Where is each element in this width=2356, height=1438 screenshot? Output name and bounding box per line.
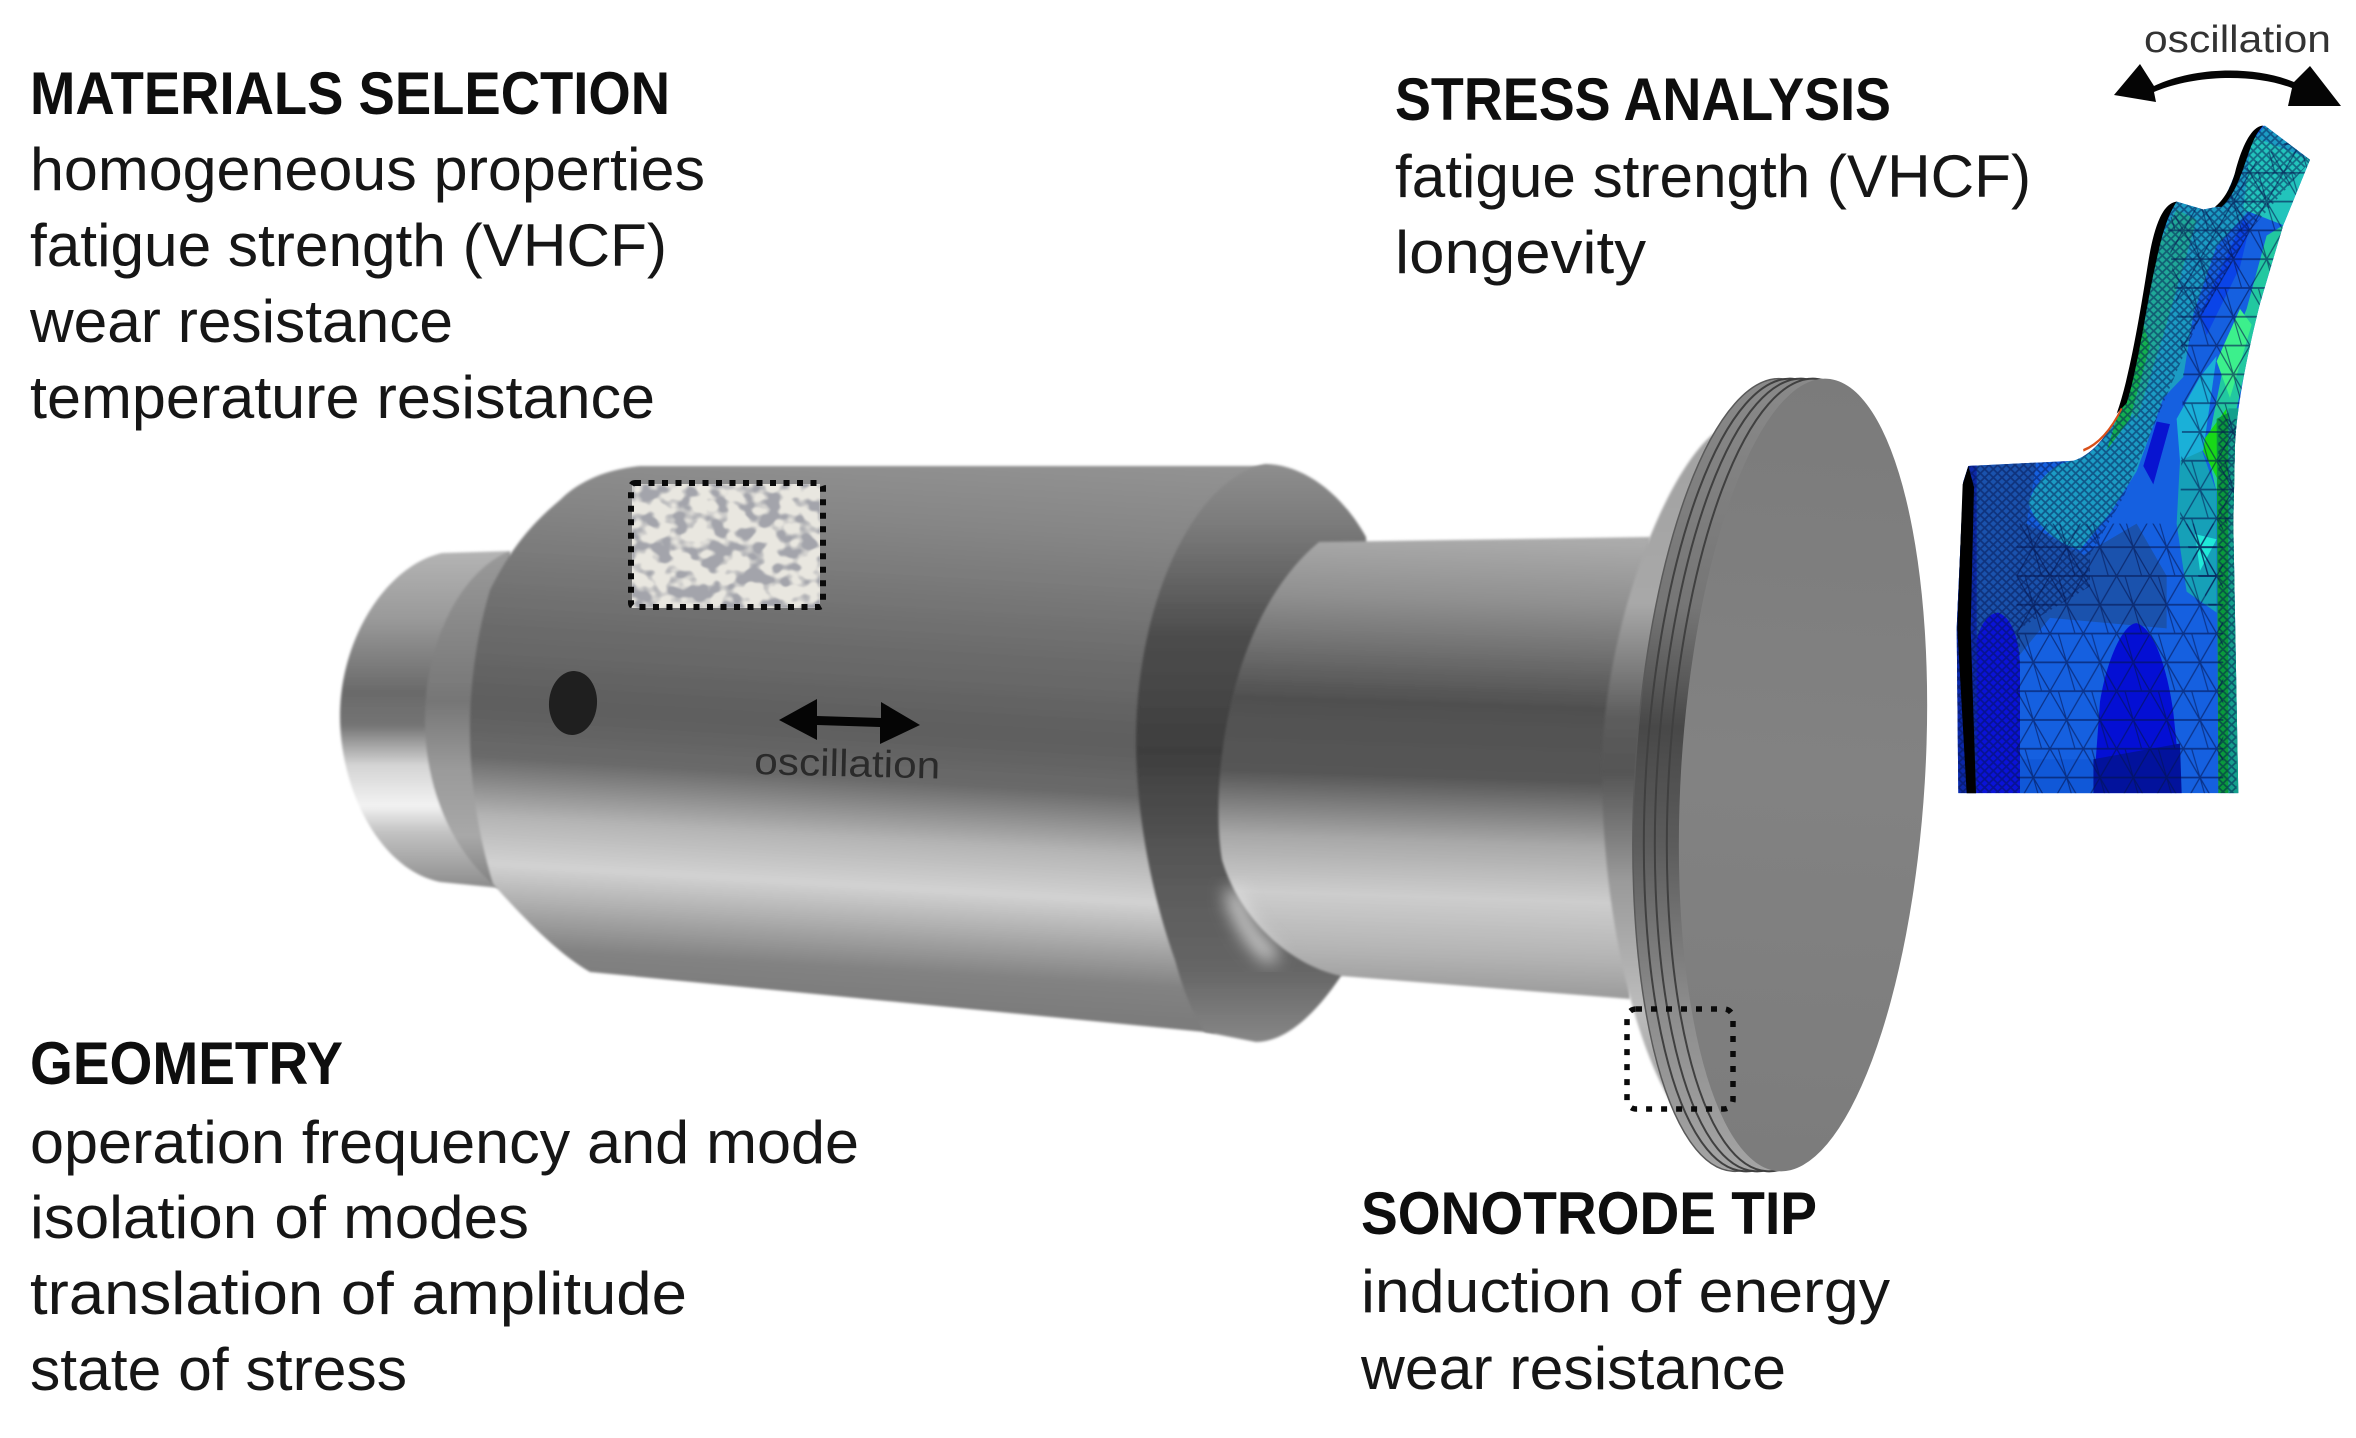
text block: geometry: state of stress: [30, 1336, 407, 1403]
axial oscillation label: oscillation: [754, 741, 941, 788]
sonotrode illustration: [340, 371, 1949, 1179]
heading: geometry: GEOMETRY: [30, 1030, 343, 1097]
neck: [1218, 537, 1650, 999]
mesh body: [1950, 105, 2323, 801]
text block: geometry: operation frequency and mode: [30, 1109, 859, 1176]
main body: [470, 466, 1270, 1033]
heading: materials selection: MATERIALS SELECTION: [30, 60, 670, 127]
heading: sonotrode tip: SONOTRODE TIP: [1361, 1180, 1817, 1247]
text block: stress analysis: fatigue strength (VHCF): [1395, 143, 2031, 210]
axial oscillation arrow: [779, 699, 920, 744]
text block: materials selection: wear resistance: [29, 288, 453, 355]
text block: stress analysis: [1395, 66, 2031, 286]
top oscillation arrow: [2114, 64, 2341, 106]
text block: geometry: isolation of modes: [30, 1184, 529, 1251]
text block: sonotrode tip: wear resistance: [1360, 1335, 1786, 1402]
text block: materials selection: temperature resistance: [30, 364, 655, 431]
materials microstructure patch: [632, 484, 820, 608]
black shadow edges: [1957, 126, 2263, 793]
neck fillet highlight: [1232, 890, 1275, 958]
grooved rim: [1611, 371, 1937, 1179]
text block: materials selection: [29, 60, 705, 431]
text block: stress analysis: longevity: [1395, 219, 1646, 286]
text block: geometry: translation of amplitude: [30, 1260, 687, 1327]
bolt hole: [547, 669, 599, 737]
text block: geometry: [30, 1030, 859, 1403]
rear stub: [340, 551, 520, 888]
text block: materials selection: fatigue strength (VHCF): [30, 212, 667, 279]
FEM stress analysis mesh: [1950, 105, 2323, 801]
tip dotted frame: [1627, 1009, 1733, 1109]
high stress edge: [2083, 408, 2122, 450]
text block: materials selection: homogeneous properties: [30, 136, 705, 203]
text block: sonotrode tip: [1360, 1180, 1890, 1402]
top oscillation label: oscillation: [2144, 19, 2331, 61]
collar: [1136, 464, 1380, 1042]
heading: stress analysis: STRESS ANALYSIS: [1395, 66, 1891, 133]
text block: sonotrode tip: induction of energy: [1361, 1258, 1890, 1325]
flange: [1602, 380, 1790, 1165]
materials dotted frame: [631, 483, 823, 607]
disc face: [1657, 371, 1949, 1179]
